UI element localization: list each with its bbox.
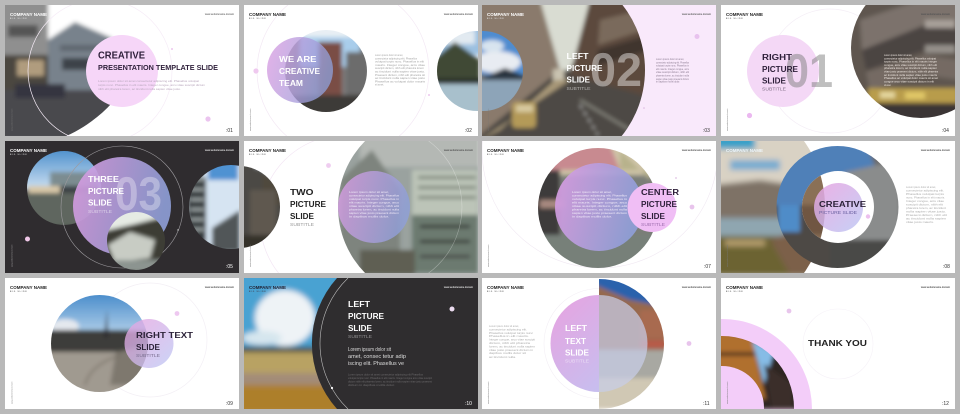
heading: RIGHT TEXT <box>136 330 194 340</box>
heading <box>279 56 320 86</box>
body text: consectetur adipiscing elit. Phasellus <box>375 56 418 60</box>
header: BIG SLIDE <box>487 154 505 156</box>
body text: elit mauris. Integer congue, arcu <box>349 200 400 204</box>
circle: pink arc <box>721 319 812 409</box>
circle: pink backdrop <box>86 35 158 107</box>
small dot <box>177 229 179 231</box>
circle: purple overlay <box>124 319 174 368</box>
body text: pharetra lorem, ac tincidunt <box>906 206 946 210</box>
header <box>487 12 712 134</box>
body text: Lorem ipsum dolor sit amet consectetur adipiscing elit Phasellus <box>348 372 424 376</box>
body text <box>348 372 432 387</box>
heading <box>88 174 124 214</box>
body text: Integer congue, arcu vitae suscipit <box>489 338 535 342</box>
panel: slide 1 creative title <box>5 5 239 136</box>
header: :10 <box>465 401 472 407</box>
header: www.websitename.domain <box>10 245 14 267</box>
header: BIG SLIDE <box>726 18 744 20</box>
number: 01 <box>785 44 833 97</box>
photo: street half circle <box>595 275 670 409</box>
header: COMPANY NAME <box>726 285 763 290</box>
number: 02 <box>590 43 642 96</box>
body text: Lorem ipsum dolor sit amet, <box>489 324 519 328</box>
header: www.websitename.domain <box>205 286 235 289</box>
small dot <box>428 94 430 96</box>
body text: Lorem ipsum dolor sit amet, <box>572 190 612 194</box>
header: BIG SLIDE <box>726 291 744 293</box>
header: BIG SLIDE <box>10 18 28 20</box>
ring: faint arc <box>28 0 172 143</box>
heading: TWO <box>290 187 314 197</box>
ring: faint circle <box>779 8 882 134</box>
body text: sit amet. <box>375 83 384 87</box>
dot <box>787 309 791 313</box>
body text: volutpat turpis nunc. Phasellus in <box>656 64 689 68</box>
dot <box>205 116 211 122</box>
heading: SUBTITLE <box>290 222 314 227</box>
heading: PICTURE <box>566 63 603 73</box>
header: COMPANY NAME <box>726 148 763 153</box>
heading: LEFT <box>566 51 589 61</box>
header: COMPANY NAME <box>10 148 47 153</box>
body text <box>98 80 205 90</box>
heading: SLIDE <box>641 211 665 221</box>
small dot <box>643 107 645 109</box>
lead text <box>348 347 406 367</box>
body text: Phasellus ac volutpat dolor mauris sit amet <box>884 76 938 80</box>
circle: gradient half and frosted half <box>550 295 648 392</box>
header: COMPANY NAME <box>487 148 524 153</box>
body text <box>884 53 938 87</box>
body text: dictum in dapibus mollis dolor. <box>348 383 395 387</box>
photo: left building <box>235 160 285 255</box>
body text <box>375 53 426 87</box>
header <box>487 148 712 270</box>
heading: PICTURE <box>762 64 798 74</box>
heading: SLIDE <box>88 198 112 208</box>
ring: faint circle <box>544 288 654 398</box>
panel: dark circle background <box>312 278 478 409</box>
photo: glass buildings <box>330 135 480 280</box>
body text: Phasellus in elit mauris. <box>489 334 529 338</box>
circle: purple overlay <box>338 171 410 243</box>
body text: consectetur adipiscing elit. Phasellus volutpat <box>884 56 936 60</box>
body text: congue, arcu vitae suscipit dictum, nibh elit <box>884 63 937 67</box>
photo: street scene <box>5 5 112 136</box>
header <box>249 12 474 134</box>
header: COMPANY NAME <box>487 12 524 17</box>
heading: PRESENTATION TEMPLATE SLIDE <box>98 65 218 72</box>
header: :08 <box>943 264 950 270</box>
dot <box>687 341 691 346</box>
heading: CENTER <box>641 187 680 197</box>
header: www.websitename.domain <box>487 245 490 267</box>
body text: turpis nunc. Phasellus in elit mauris. Integer congue, arcu vitae suscipit dictum <box>98 83 206 87</box>
body text: in dapibus mollis dolor. <box>656 79 680 83</box>
body text: pharetra lorem, ac tincidunt nulla sapien <box>884 66 937 70</box>
body text: ac tincidunt nulla sapien <box>906 216 947 220</box>
circle: white centre <box>802 171 874 243</box>
body text: Lorem ipsum dolor sit amet, <box>375 53 403 57</box>
ring: faint circle <box>93 283 207 397</box>
panel: slide 3 left picture <box>482 5 716 136</box>
body text: vitae suscipit dictum, nibh elit <box>572 204 627 208</box>
photo: fjord <box>437 31 478 111</box>
heading: PICTURE SLIDE <box>819 210 857 215</box>
body text: vitae suscipit dictum, nibh elit <box>656 70 689 74</box>
body text: volutpat turpis nunc. Phasellus in <box>572 197 628 201</box>
circle: inner pink <box>721 366 764 409</box>
header: www.websitename.domain <box>682 149 712 152</box>
header: www.websitename.domain <box>682 13 712 16</box>
heading: SLIDE <box>762 76 786 86</box>
photo: tower <box>285 30 367 112</box>
heading: LEFT <box>348 299 371 309</box>
body text: pharetra lorem, ac tincidunt nulla <box>349 208 400 212</box>
header: :03 <box>703 128 710 134</box>
body text: Lorem ipsum dolor sit amet, <box>884 53 912 57</box>
body text: Lorem ipsum dolor sit amet consectetur adipiscing elit. Phasellus volutpat <box>98 79 199 83</box>
panel: slide 10 left picture dark <box>238 270 478 414</box>
header: www.websitename.domain <box>921 286 951 289</box>
body text: in dapibus mollis dolor. <box>572 214 612 218</box>
header: www.websitename.domain <box>205 149 235 152</box>
circle: purple overlay <box>73 157 171 255</box>
panel: slide 2 we are creative team <box>244 5 478 136</box>
heading <box>136 330 194 358</box>
ring: faint overlay arc <box>298 125 462 289</box>
header: :05 <box>226 264 233 270</box>
header: :09 <box>226 401 233 407</box>
photo: tall building <box>185 160 245 255</box>
heading: PICTURE <box>88 186 124 196</box>
body text: dictum nibh elit pharetra lorem, ac tincidunt nulla sapien vitae justo praesent <box>348 380 432 384</box>
heading: TEXT <box>565 336 587 346</box>
header: :01 <box>226 128 233 134</box>
header: BIG SLIDE <box>249 154 267 156</box>
heading: PICTURE <box>641 199 677 209</box>
dot <box>694 34 700 39</box>
body text: Integer congue, arcu vitae <box>906 199 945 203</box>
photo: church street <box>45 290 155 400</box>
dot <box>25 236 30 242</box>
heading: SLIDE <box>290 211 314 221</box>
heading: SUBTITLE <box>566 86 590 91</box>
body text: Lorem ipsum dolor sit amet, <box>349 190 389 194</box>
header: www.websitename.domain <box>487 382 490 404</box>
photo: mountain crescent <box>795 165 835 250</box>
body text: ac tincidunt nulla sapien vitae justo. <box>375 70 425 74</box>
heading: LEFT <box>565 323 588 333</box>
heading: CREATIVE <box>279 66 320 76</box>
header: www.websitename.domain <box>682 286 712 289</box>
body text: Phasellus volutpat turpis <box>906 192 945 196</box>
body text: suscipit dictum, nibh elit <box>906 202 943 206</box>
heading: SLIDE <box>566 74 590 84</box>
body text: sapien vitae justo praesent dictum <box>349 211 400 215</box>
body text: Praesent dictum, nibh elit pharetra sit <box>375 73 425 77</box>
photo: old town alley <box>715 330 800 409</box>
header: www.websitename.domain <box>249 245 252 267</box>
panel: slide 6 two picture <box>235 125 480 305</box>
panel: slide 11 left text <box>482 275 716 409</box>
body text: consectetur adipiscing elit. Phasellus <box>656 60 689 64</box>
small dot <box>675 177 677 179</box>
body text <box>572 190 628 218</box>
heading: CREATIVE <box>98 50 145 62</box>
body text: Lorem ipsum dolor sit amet, <box>656 57 684 61</box>
body text <box>349 190 400 218</box>
heading <box>98 52 218 70</box>
heading <box>566 51 603 91</box>
panel: slide 4 right picture <box>721 0 960 136</box>
body text: turpis nunc. Phasellus in elit mauris integer <box>884 60 937 64</box>
header: www.websitename.domain <box>726 245 729 267</box>
heading <box>348 299 384 339</box>
photo: blue building ring <box>770 140 905 275</box>
header <box>726 148 951 270</box>
heading: TEAM <box>279 78 303 88</box>
body text: ac tincidunt nulla sapien vitae justo mauris <box>884 73 938 77</box>
header: BIG SLIDE <box>249 18 267 20</box>
header: BIG SLIDE <box>249 291 267 293</box>
header: COMPANY NAME <box>726 12 763 17</box>
heading: RIGHT <box>762 52 793 62</box>
body text: elit mauris. Integer congue, arcu <box>656 67 689 71</box>
header <box>726 285 951 407</box>
body text: vitae justo praesent dictum in <box>489 348 534 352</box>
header: www.websitename.domain <box>444 286 474 289</box>
circle: purple title backdrop <box>814 183 863 232</box>
body text: ac tincidunt nulla. <box>489 355 516 359</box>
panel: slide 7 center picture <box>482 32 718 275</box>
dot <box>253 68 259 74</box>
header <box>10 12 235 134</box>
lead text: Lorem ipsum dolor sit <box>348 347 391 353</box>
header: COMPANY NAME <box>249 12 286 17</box>
panel: slide 12 thank you <box>715 278 955 409</box>
header: BIG SLIDE <box>487 291 505 293</box>
heading: THREE <box>88 174 119 184</box>
dot <box>747 113 752 118</box>
ring: thin white arc <box>320 278 348 409</box>
header <box>249 148 474 267</box>
photo: mountains and lake <box>715 135 835 280</box>
heading: SUBTITLE <box>641 222 665 227</box>
header: :04 <box>942 128 949 134</box>
dot <box>450 306 454 312</box>
header: www.websitename.domain <box>726 382 729 404</box>
header: BIG SLIDE <box>487 18 505 20</box>
body text: volutpat turpis nunc. Phasellus in <box>349 197 400 201</box>
header: www.websitename.domain <box>921 13 951 16</box>
body text <box>656 57 690 83</box>
ring: faint circle <box>803 309 873 379</box>
body text: nulla sapien vitae justo. <box>906 210 946 214</box>
header: www.websitename.domain <box>444 149 474 152</box>
body text: dictum, nibh elit pharetra <box>489 341 531 345</box>
header: www.websitename.domain <box>921 149 951 152</box>
small dot <box>171 48 173 50</box>
body text: consectetur adipiscing elit. <box>489 327 527 331</box>
header <box>726 12 951 134</box>
ring: thin circle <box>61 146 183 268</box>
heading: CREATIVE <box>819 199 866 209</box>
heading <box>762 52 798 92</box>
dot <box>175 311 179 316</box>
body text: Phasellus volutpat turpis nunc <box>489 331 534 335</box>
photo: road with yellow car <box>482 5 645 136</box>
body text: volutpat turpis nunc. Phasellus in elit mauris. Integer congue arcu vitae suscipit <box>348 376 432 380</box>
header: COMPANY NAME <box>10 285 47 290</box>
header: COMPANY NAME <box>249 148 286 153</box>
photo: corner building <box>851 5 955 118</box>
dot on ring <box>331 387 333 389</box>
heading: SUBTITLE <box>762 86 786 92</box>
dot <box>690 205 694 209</box>
dot <box>866 214 870 219</box>
panel: slide 5 three picture dark <box>5 141 245 275</box>
dot <box>326 163 331 168</box>
panel: slide 9 right text <box>5 278 239 409</box>
body text: consectetur adipiscing elit. Phasellus <box>572 194 628 198</box>
header: COMPANY NAME <box>249 285 286 290</box>
header: COMPANY NAME <box>10 12 47 17</box>
heading: WE ARE <box>279 54 317 64</box>
heading: SUBTITLE <box>136 353 160 358</box>
body text: in dapibus mollis dolor. <box>349 214 389 218</box>
header: www.websitename.domain <box>10 109 14 131</box>
body text: elit mauris. Integer congue, arcu <box>572 200 628 204</box>
heading: THANK YOU <box>808 338 867 348</box>
body text: vitae justo praesent dictum, nibh elit pharetra <box>884 70 938 74</box>
header: www.websitename.domain <box>205 13 235 16</box>
heading: SLIDE <box>348 323 372 333</box>
photo: lake inset <box>482 31 523 111</box>
ring: faint arc <box>256 5 430 136</box>
heading <box>565 323 589 364</box>
photo: waterfront <box>27 151 101 225</box>
header: :02 <box>465 128 472 134</box>
heading: PICTURE <box>290 199 326 209</box>
body text: vitae justo mauris. <box>906 220 934 224</box>
body text: sapien vitae justo praesent dictum <box>656 77 690 81</box>
header: www.websitename.domain <box>10 382 14 404</box>
heading <box>819 199 866 215</box>
body text: suscipit dictum, nibh elit pharetra lorem <box>375 66 425 70</box>
body text <box>906 185 947 224</box>
body text: vitae suscipit dictum, nibh elit <box>349 204 399 208</box>
body text: dapibus mollis dolor sit <box>489 351 526 355</box>
body text: pharetra lorem, ac tincidunt nulla <box>572 208 628 212</box>
heading: SLIDE <box>565 348 589 358</box>
header: :07 <box>704 264 711 270</box>
header <box>10 148 235 270</box>
circle: purple overlay <box>555 163 643 251</box>
panel: slide 8 creative picture slide <box>715 135 955 280</box>
heading: SUBTITLE <box>348 334 372 339</box>
photo: field and sky <box>238 270 358 414</box>
body text: pharetra lorem, ac tincidunt nulla <box>656 74 689 78</box>
lead text: amet, consec tetur adip <box>348 354 406 360</box>
photo: ship <box>100 205 175 275</box>
header: BIG SLIDE <box>10 154 28 156</box>
ring: faint arc <box>260 135 430 305</box>
body text: Phasellus ac volutpat dolor mauris <box>375 79 426 83</box>
header: www.websitename.domain <box>487 109 490 131</box>
header <box>487 285 712 407</box>
body text: volutpat turpis nunc. Phasellus in elit <box>375 60 424 64</box>
header <box>249 285 474 407</box>
header: www.websitename.domain <box>726 109 729 131</box>
circle: purple overlay <box>267 37 333 103</box>
body text: consectetur adipiscing elit. Phasellus <box>349 194 400 198</box>
body text: consectetur adipiscing elit. <box>906 188 944 192</box>
body text: nunc. Phasellus in elit mauris. <box>906 196 945 200</box>
header: :12 <box>942 401 949 407</box>
heading: SUBTITLE <box>565 358 589 364</box>
header: COMPANY NAME <box>487 285 524 290</box>
heading <box>641 187 680 227</box>
header: :11 <box>703 401 710 407</box>
heading <box>290 187 326 227</box>
circle: pink title backdrop <box>628 183 676 232</box>
body text: Praesent dictum, nibh elit <box>906 213 947 217</box>
body text: congue arcu vitae suscipit dictum in elit <box>884 79 934 83</box>
header: www.websitename.domain <box>444 13 474 16</box>
body text <box>489 324 536 359</box>
heading: SUBTITLE <box>88 209 112 214</box>
body text: nibh elit pharetra lorem, ac tincidunt nulla sapien vitae justo. <box>98 87 181 91</box>
body text: sapien vitae justo praesent dictum <box>572 211 628 215</box>
body text: ac tincidunt nulla sapien vitae justo <box>375 76 426 80</box>
heading: PICTURE <box>348 311 384 321</box>
circle: pink backdrop <box>747 35 819 107</box>
header: www.websitename.domain <box>249 109 252 131</box>
photo: town street <box>530 140 665 275</box>
heading: SLIDE <box>136 342 160 352</box>
body text: sit amet. <box>884 83 891 87</box>
body text: lorem, ac tincidunt nulla sapien <box>489 344 536 348</box>
ring: faint arc <box>482 32 718 268</box>
body text: Lorem ipsum dolor sit amet, <box>906 185 936 189</box>
header <box>10 285 235 407</box>
header: BIG SLIDE <box>10 291 28 293</box>
body text: mauris. Integer congue, arcu vitae <box>375 63 426 67</box>
lead text: iscing elit. Phasellus ve <box>348 361 404 367</box>
number: 03 <box>115 167 162 220</box>
